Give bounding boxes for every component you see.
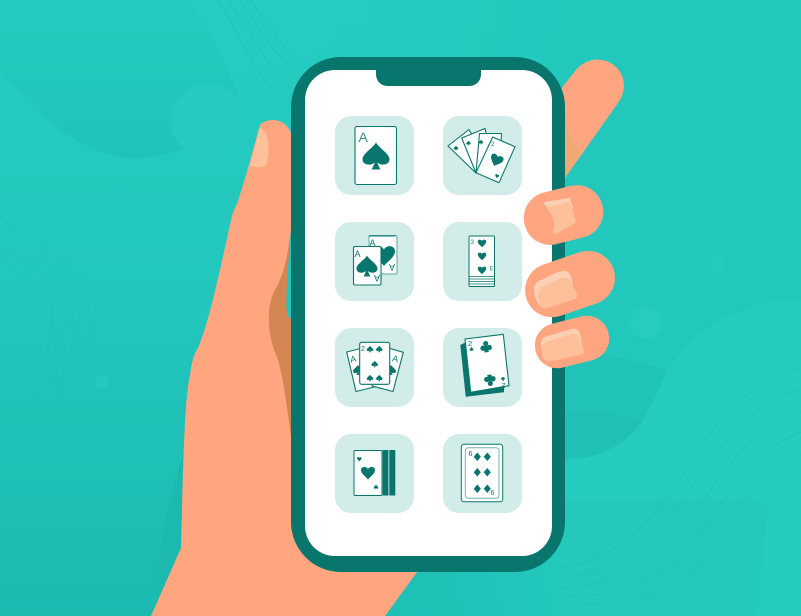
thumb nail bbox=[250, 128, 268, 167]
hand and thumb bbox=[151, 120, 420, 616]
finger 1 bbox=[518, 180, 609, 250]
finger 2 bbox=[518, 243, 622, 325]
tile: three fanned cards: A bbox=[349, 354, 357, 365]
tile: two aces: A bbox=[370, 238, 376, 248]
phone bbox=[291, 57, 565, 572]
screen bbox=[305, 70, 552, 556]
notch bbox=[376, 69, 481, 86]
tile: two aces: A bbox=[374, 273, 380, 283]
tile: two of clubs deck: 2 bbox=[501, 381, 506, 388]
tile: fan of four cards: 2 bbox=[491, 142, 495, 148]
tile: fan of four cards bbox=[443, 116, 522, 195]
tile: two aces bbox=[335, 222, 414, 301]
tile: six of diamonds: 6 bbox=[490, 490, 494, 497]
tile: three fanned cards: 2 bbox=[361, 346, 365, 353]
tile: stack with hearts bbox=[443, 222, 522, 301]
tile: two aces: A bbox=[389, 262, 395, 272]
tile: stack with hearts: 3 bbox=[489, 264, 493, 270]
tile: two aces: A bbox=[354, 249, 361, 259]
tile: ace of spades: A bbox=[358, 129, 368, 145]
tile: stack with hearts: 3 bbox=[470, 240, 474, 246]
index finger behind phone bbox=[560, 60, 624, 185]
tile: two of clubs deck: 2 bbox=[468, 339, 472, 348]
tile: two of clubs deck bbox=[443, 328, 522, 407]
gap between palm and phone bbox=[286, 228, 292, 319]
palm shadow bbox=[269, 228, 300, 436]
tile: six of diamonds: 6 bbox=[468, 451, 472, 458]
finger 3 bbox=[530, 311, 614, 373]
tile: six of diamonds bbox=[443, 434, 522, 513]
tile: heart card and deck edge bbox=[335, 434, 414, 513]
tile: three fanned cards bbox=[335, 328, 414, 407]
tile: three fanned cards: A bbox=[391, 353, 399, 364]
tile: ace of spades bbox=[335, 116, 414, 195]
